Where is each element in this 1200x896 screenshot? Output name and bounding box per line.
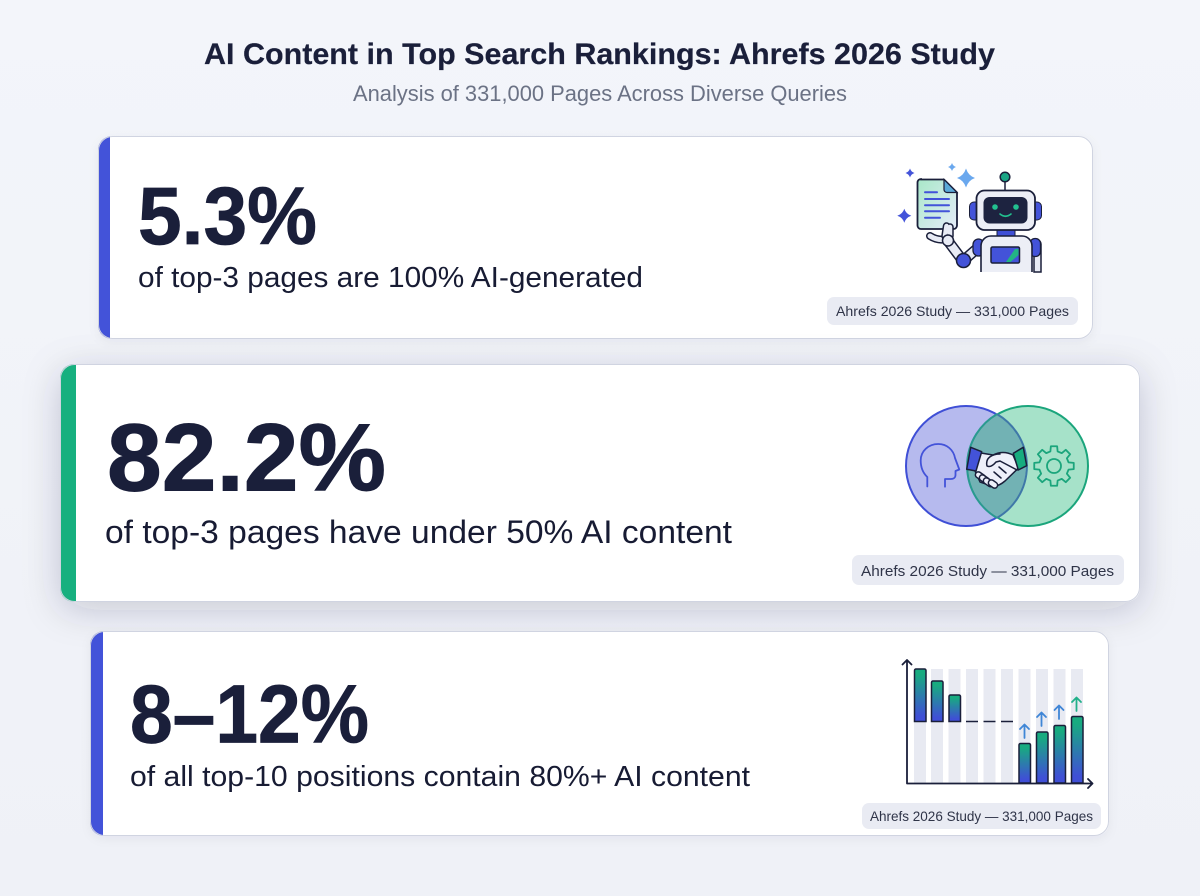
title: AI Content in Top Search Rankings: Ahrefs 2026 Study (204, 38, 995, 71)
stat number: 82.2%: 82.2% (107, 404, 386, 512)
source badge: Ahrefs 2026 Study — 331,000 Pages (836, 303, 1069, 319)
source badge: Ahrefs 2026 Study — 331,000 Pages (870, 808, 1093, 824)
icon: gear (1034, 446, 1074, 486)
bar chart: AI content by position (902, 660, 1092, 788)
stat description: of top-3 pages are 100% AI-generated (138, 262, 643, 294)
stat description: of all top-10 positions contain 80%+ AI content (130, 761, 750, 793)
stat number: 5.3%: 5.3% (138, 171, 317, 262)
document (918, 179, 957, 229)
icon: human and AI venn handshake (906, 406, 1088, 526)
icon: human head (921, 444, 959, 487)
panel: 8–12% stat card (90, 631, 1109, 836)
source badge: Ahrefs 2026 Study — 331,000 Pages (861, 563, 1114, 580)
icon: robot holding document (897, 163, 1042, 272)
subtitle: Analysis of 331,000 Pages Across Diverse Queries (353, 81, 847, 106)
robot head and body (1004, 178, 1006, 190)
stat number: 8–12%: 8–12% (130, 668, 369, 760)
icon: handshake (967, 447, 1027, 489)
source badge (862, 803, 1101, 829)
robot arm and hand (948, 241, 963, 261)
panel: 5.3% stat card (98, 136, 1093, 339)
stat description: of top-3 pages have under 50% AI content (105, 514, 732, 550)
source badge (827, 297, 1078, 325)
panel: 82.2% stat card (60, 364, 1140, 602)
source badge (852, 555, 1124, 585)
